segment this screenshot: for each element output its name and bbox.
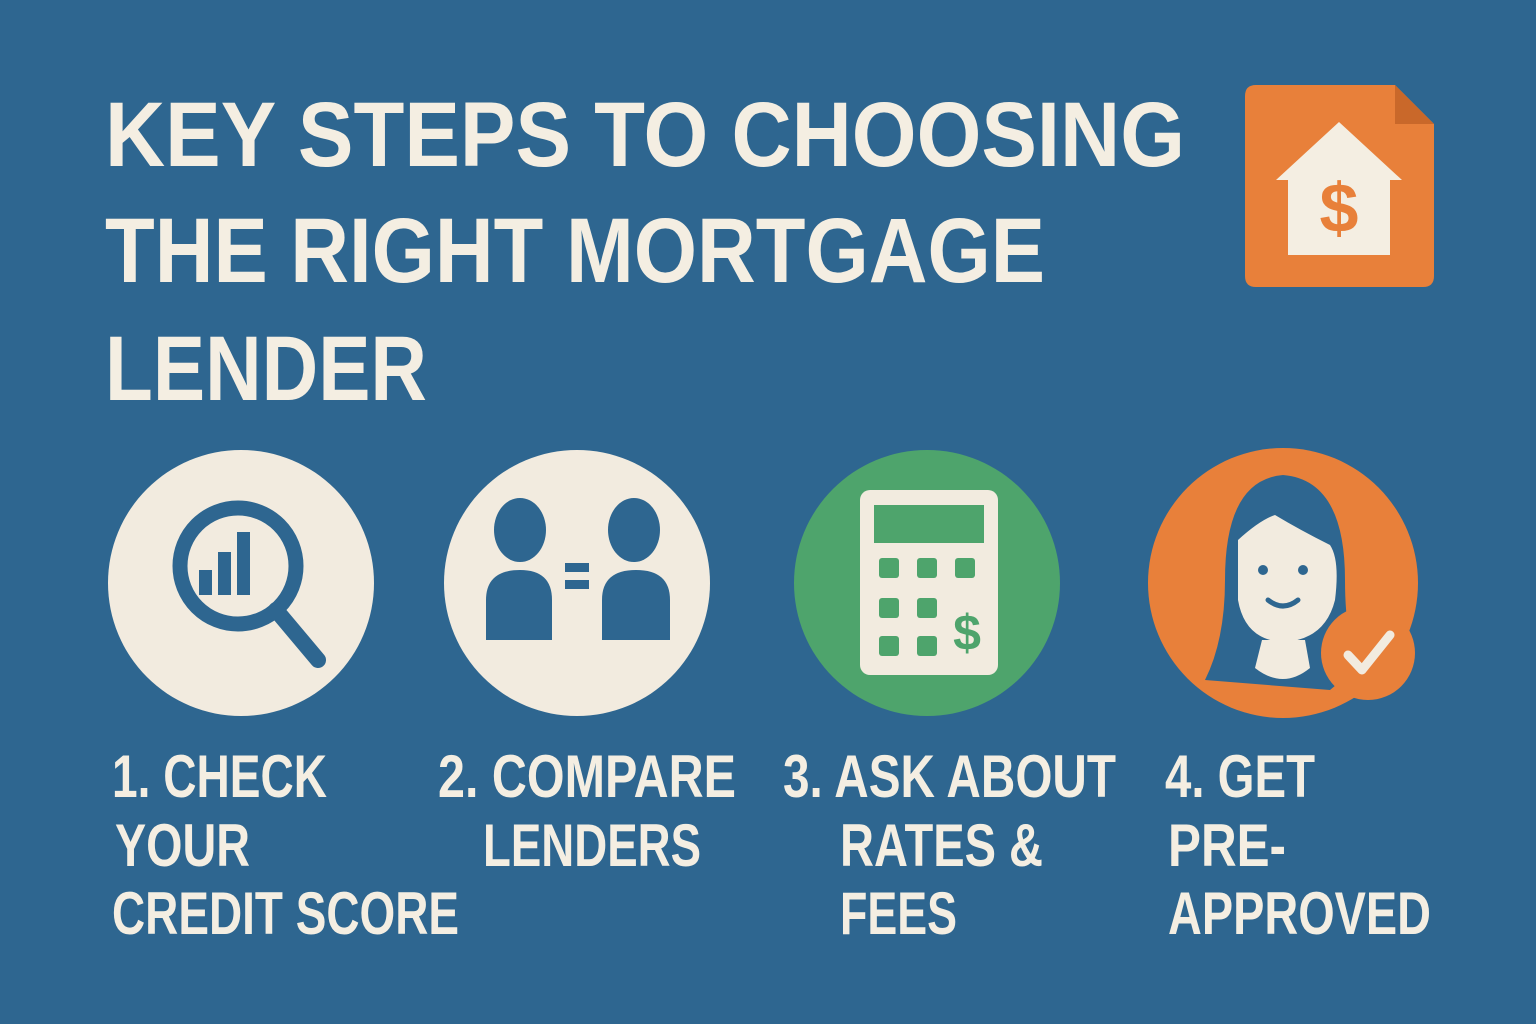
label: step 4: 4. GET [1165,743,1315,810]
label: step 1: CREDIT SCORE [112,880,459,947]
label: step 1: YOUR [115,812,250,879]
label: step 2: LENDERS [483,812,701,879]
label: step 4: PRE- [1168,812,1286,879]
icon: house document: $ [1320,169,1358,247]
title [105,84,1185,420]
label: step 2: 2. COMPARE [438,743,736,810]
icon: house document [1245,85,1434,287]
title: KEY STEPS TO CHOOSING [105,84,1185,186]
label: step 3: RATES & [840,812,1043,879]
icon: calculator: $ [953,605,981,661]
icon: calculator [794,450,1060,716]
icon: approved woman [1148,448,1418,718]
label: step 1 [112,743,459,947]
label: step 3: 3. ASK ABOUT [783,743,1116,810]
label: step 3: FEES [840,880,957,947]
label: step 2 [438,743,736,879]
title: LENDER [105,318,427,420]
label: step 4: APPROVED [1168,880,1431,947]
title: THE RIGHT MORTGAGE [105,200,1045,302]
label: step 1: 1. CHECK [112,743,327,810]
icon: magnifier credit score [108,450,374,716]
label: step 3 [783,743,1116,947]
icon: two people [444,450,710,716]
label: step 4 [1165,743,1431,947]
